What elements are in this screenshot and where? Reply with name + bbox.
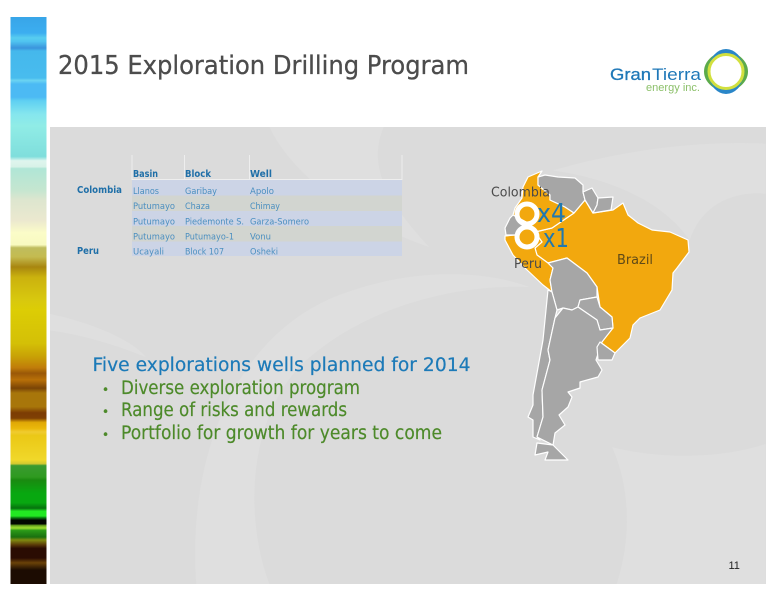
bullet list: Portfolio for growth for years to come [121,423,442,444]
bullet list: • [102,428,109,442]
Paraguay [578,297,613,330]
country labels: Peru [77,246,99,257]
table row bands [132,155,402,256]
background panel [50,127,766,584]
table header: Block [185,169,211,180]
left colour strip [10,17,46,584]
Bolivia [548,258,597,310]
table body: Putumayo [133,216,175,228]
table body: Putumayo [133,201,175,212]
summary text [92,355,470,444]
page number: 11 [728,560,740,572]
table body: Piedemonte S. [185,216,244,228]
well counts: x1 [543,224,569,254]
Argentina [537,307,613,445]
summary text: Five explorations wells planned for 2014 [92,355,470,376]
map labels: Peru [514,256,542,272]
map labels [491,184,653,272]
table body: Chimay [250,201,280,212]
table body: Apolo [250,186,274,197]
Chile [528,290,557,440]
table header: Well [250,169,272,180]
table body [133,186,309,258]
Ecuador [505,215,528,235]
country labels [77,185,122,257]
Guyana [583,188,598,213]
bullet list: Diverse exploration program [121,378,360,399]
table body: Garibay [185,186,217,197]
well counts: x4 [537,199,566,229]
logo: Gran Tierra energy inc.: Gran [610,65,651,84]
title: 2015 Exploration Drilling Program [58,51,469,81]
table body: Osheki [250,246,278,258]
table body: Ucayali [133,246,164,258]
Peru [505,223,553,292]
table body: Block 107 [185,246,224,258]
logo: Gran Tierra energy inc.: Tierra [652,65,702,84]
table header: Basin [133,169,158,180]
map labels: Colombia [491,184,550,200]
Uruguay [597,342,615,360]
table header [133,169,272,180]
table: exploration wells [77,155,402,258]
logo: Gran Tierra energy inc.: energy inc. [646,82,700,94]
table body: Chaza [185,201,210,212]
bullet list: Range of risks and rewards [121,400,347,421]
map labels: Brazil [617,252,653,268]
Venezuela [538,175,585,213]
bullet list [102,378,442,444]
Colombia [513,171,574,232]
table body: Putumayo-1 [185,232,234,242]
country labels: Colombia [77,185,122,196]
logo: Gran Tierra energy inc. [610,49,748,94]
table body: Llanos [133,186,159,197]
table body: Garza-Somero [250,216,309,228]
bullet list: • [102,383,109,397]
well counts [537,199,569,254]
Suriname and French Guiana [593,197,613,213]
Brazil [535,200,689,353]
table body: Vonu [250,232,271,242]
table body: Putumayo [133,232,175,242]
Tierra del Fuego [535,443,568,460]
map of South America [505,171,689,460]
bullet list: • [102,405,109,419]
well markers [517,204,537,247]
